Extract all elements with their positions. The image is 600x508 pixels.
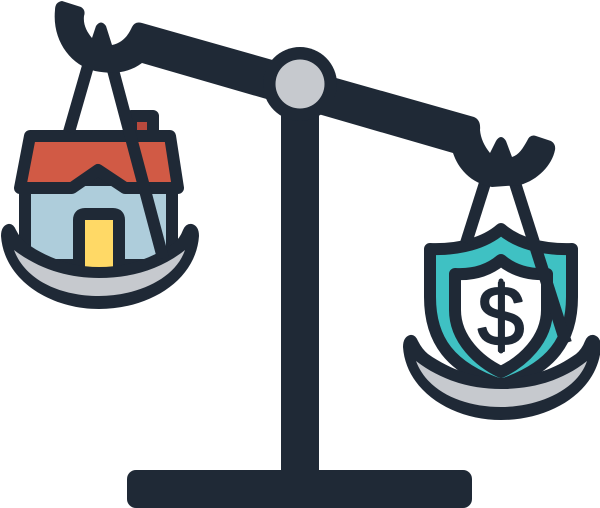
right pan ropes: [466, 183, 566, 343]
inner shield: [455, 260, 547, 372]
right pan: [403, 335, 600, 420]
dollar sign: $: [478, 269, 524, 363]
pivot hub: [263, 47, 337, 121]
left pan ropes: [69, 66, 163, 258]
door: [79, 214, 119, 270]
icon: shield with dollar sign: [430, 229, 572, 385]
chimney: [131, 116, 153, 136]
house walls: [25, 180, 172, 265]
left pan: [1, 224, 199, 309]
icon: house: [20, 116, 178, 270]
stand pole and base: [127, 100, 472, 508]
balance beam with hook cups: [55, 1, 555, 187]
outer shield: [430, 229, 572, 385]
roof: [20, 136, 178, 188]
